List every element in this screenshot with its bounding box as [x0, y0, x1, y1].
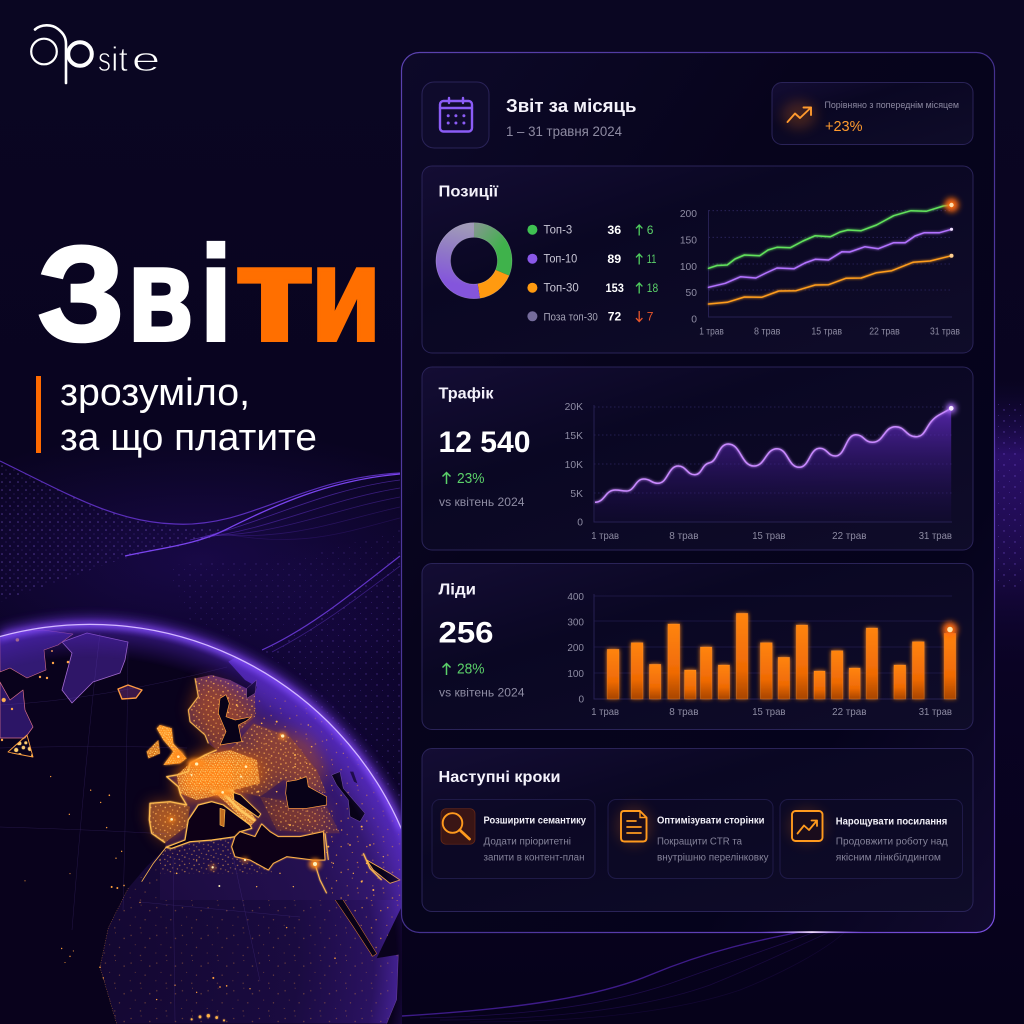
scattered lights	[24, 776, 336, 1000]
step: optimize pages: Оптимізувати сторінки	[657, 815, 764, 826]
line chart: positions: 8 трав	[754, 326, 780, 338]
title: Звіти: і	[200, 220, 232, 369]
area chart: traffic: 8 трав	[669, 530, 699, 542]
series: green	[708, 205, 952, 268]
decorative wave: bottom right	[402, 932, 845, 1022]
icon: magnifier	[441, 809, 475, 844]
bright cities	[159, 704, 384, 891]
step: optimize pages: внутрішню перелінковку	[657, 853, 768, 864]
area chart: traffic: 0	[577, 518, 583, 528]
step: optimize pages	[608, 800, 773, 878]
decorative wave: upper ribbon	[0, 461, 400, 602]
logo: apsite: s	[98, 41, 111, 79]
step: build links: Нарощувати посилання	[836, 817, 947, 828]
legend row: top 10: 89	[607, 252, 622, 266]
area chart: traffic: 10K	[565, 460, 583, 471]
decorative wave: lower ribbon with dots	[165, 530, 400, 800]
report dates: 1 – 31 травня 2024	[506, 124, 622, 139]
legend row: outside top 30	[527, 310, 654, 324]
East Africa coast	[387, 955, 398, 1024]
line chart: positions: 22 трав	[869, 326, 900, 338]
line chart: positions: 31 трав	[930, 326, 960, 338]
metric: traffic value: 12 540	[438, 426, 530, 459]
subtitle with accent bar: за що платите	[60, 417, 317, 459]
area chart: traffic	[565, 402, 956, 542]
step: optimize pages: Покращити CTR та	[657, 837, 742, 848]
subtitle with accent bar: зрозуміло,	[60, 372, 250, 414]
report header	[422, 82, 636, 148]
step: build links	[780, 800, 962, 878]
legend row: top 30: 18	[647, 281, 658, 295]
legend row: outside top 30: 72	[608, 310, 622, 324]
legend row: top 30: Топ-30	[544, 283, 579, 295]
globe outer glow	[0, 624, 402, 829]
line chart: positions: 150	[680, 236, 697, 246]
legend row: top 30	[527, 281, 658, 295]
logo: apsite: e	[132, 41, 160, 79]
title: Звіти: и	[311, 220, 381, 369]
step: expand semantics	[432, 800, 595, 878]
area chart: traffic: 5K	[570, 489, 583, 500]
bar chart: leads: 100	[567, 669, 584, 680]
logo: apsite: t	[118, 41, 128, 79]
legend row: top 30: 153	[606, 281, 624, 295]
bar chart: leads: 22 трав	[832, 706, 867, 718]
legend row: outside top 30: Поза топ-30	[544, 311, 598, 323]
title: Звіти: З	[38, 220, 124, 369]
British Isles	[147, 725, 187, 765]
West African coast	[100, 888, 128, 1024]
metric: traffic growth	[442, 471, 485, 487]
line chart: positions: 50	[686, 288, 697, 299]
legend row: top 3: 36	[607, 223, 622, 237]
legend row: top 3	[527, 223, 654, 237]
logo: apsite: i	[111, 41, 119, 79]
step: expand semantics: Додати пріоритетні	[484, 837, 571, 848]
area chart: traffic: 1 трав	[591, 530, 619, 542]
logo: apsite	[31, 25, 161, 83]
legend	[527, 223, 658, 324]
comparison badge: Порівняно з попереднім місяцем	[824, 100, 959, 111]
bar chart: leads	[567, 592, 958, 718]
title: Звіти	[38, 220, 381, 369]
line chart: positions: 0	[691, 314, 697, 326]
globe rim shading	[0, 624, 402, 1024]
panel: leads	[422, 564, 973, 730]
seas with lit coasts	[166, 680, 400, 883]
area chart: traffic: 15K	[565, 431, 583, 442]
metric: traffic comparison: vs квітень 2024	[439, 495, 525, 509]
comparison badge	[772, 82, 973, 144]
step: expand semantics: запити в контент-план	[484, 853, 584, 864]
metric: leads value: 256	[438, 616, 494, 650]
heading: positions: Позиції	[438, 184, 499, 200]
Eurasia land	[149, 655, 405, 900]
regional light wash	[149, 675, 340, 843]
panel: next steps	[422, 748, 973, 912]
bar chart: leads: 15 трав	[752, 706, 786, 718]
warm underglow	[149, 680, 327, 843]
icon: growth chart	[788, 808, 826, 844]
line chart: positions: 15 трав	[811, 326, 842, 338]
area chart: traffic: 22 трав	[832, 530, 867, 542]
legend row: top 10: 11	[647, 252, 657, 266]
metric: leads comparison: vs квітень 2024	[439, 685, 525, 699]
bar chart: leads: 31 трав	[919, 706, 952, 718]
panel: monthly report	[402, 52, 994, 933]
line chart: positions	[680, 198, 960, 338]
donut chart	[436, 223, 512, 299]
graticule	[0, 633, 300, 1021]
Arabia lights	[345, 900, 398, 948]
legend row: top 10	[527, 252, 657, 266]
comparison badge: +23%	[825, 118, 862, 135]
series: orange	[708, 256, 952, 304]
area chart: traffic: 31 трав	[919, 530, 952, 542]
line chart: positions: 1 трав	[699, 326, 724, 338]
subtitle with accent bar	[36, 372, 317, 459]
bar chart: leads: 200	[567, 643, 584, 654]
metric: leads growth: 28%	[457, 662, 485, 678]
icon: document	[616, 806, 652, 846]
title: Звіти: т	[235, 220, 314, 369]
heading: leads: Ліди	[438, 582, 476, 598]
Africa lights	[104, 869, 398, 1022]
area chart: traffic: 20K	[565, 402, 583, 413]
lit Atlantic and Nordic coasts	[142, 678, 382, 893]
heading: traffic: Трафік	[438, 386, 494, 402]
step: build links: Продовжити роботу над	[836, 836, 948, 848]
icon: calendar	[422, 82, 489, 148]
legend row: outside top 30: 7	[647, 310, 654, 324]
title: Звіти: в	[128, 220, 193, 369]
series: purple	[708, 229, 952, 287]
legend row: top 3: Топ-3	[544, 225, 572, 237]
heading: next steps: Наступні кроки	[438, 769, 560, 786]
step: expand semantics: Розширити семантику	[484, 815, 586, 826]
panel: positions	[422, 166, 973, 353]
Red Sea	[335, 900, 377, 957]
panel: traffic	[422, 367, 973, 550]
bar chart: leads: 1 трав	[591, 706, 619, 718]
legend row: top 3: 6	[647, 223, 654, 237]
metric: traffic growth: 23%	[457, 471, 485, 487]
metric: leads growth	[442, 662, 485, 678]
legend row: top 10: Топ-10	[544, 254, 577, 266]
bar chart: leads: 300	[567, 618, 584, 628]
Africa and Arabia land	[100, 850, 401, 1024]
city light textures	[149, 675, 405, 900]
line chart: positions: 200	[680, 209, 697, 220]
line chart: positions: 100	[680, 262, 697, 273]
bar chart: leads: 0	[578, 694, 584, 706]
report title: Звіт за місяць	[506, 96, 636, 116]
Greenland, Iceland and North America	[0, 630, 142, 757]
area chart: traffic: 15 трав	[752, 530, 786, 542]
bar chart: leads: 400	[567, 592, 584, 603]
icon: trend arrow	[788, 108, 811, 122]
step: build links: якісним лінкбілдингом	[836, 852, 941, 864]
Europe and Middle East	[142, 655, 405, 900]
ocean	[32, 625, 256, 738]
globe with city lights	[0, 624, 405, 1024]
bar chart: leads: 8 трав	[669, 706, 699, 718]
